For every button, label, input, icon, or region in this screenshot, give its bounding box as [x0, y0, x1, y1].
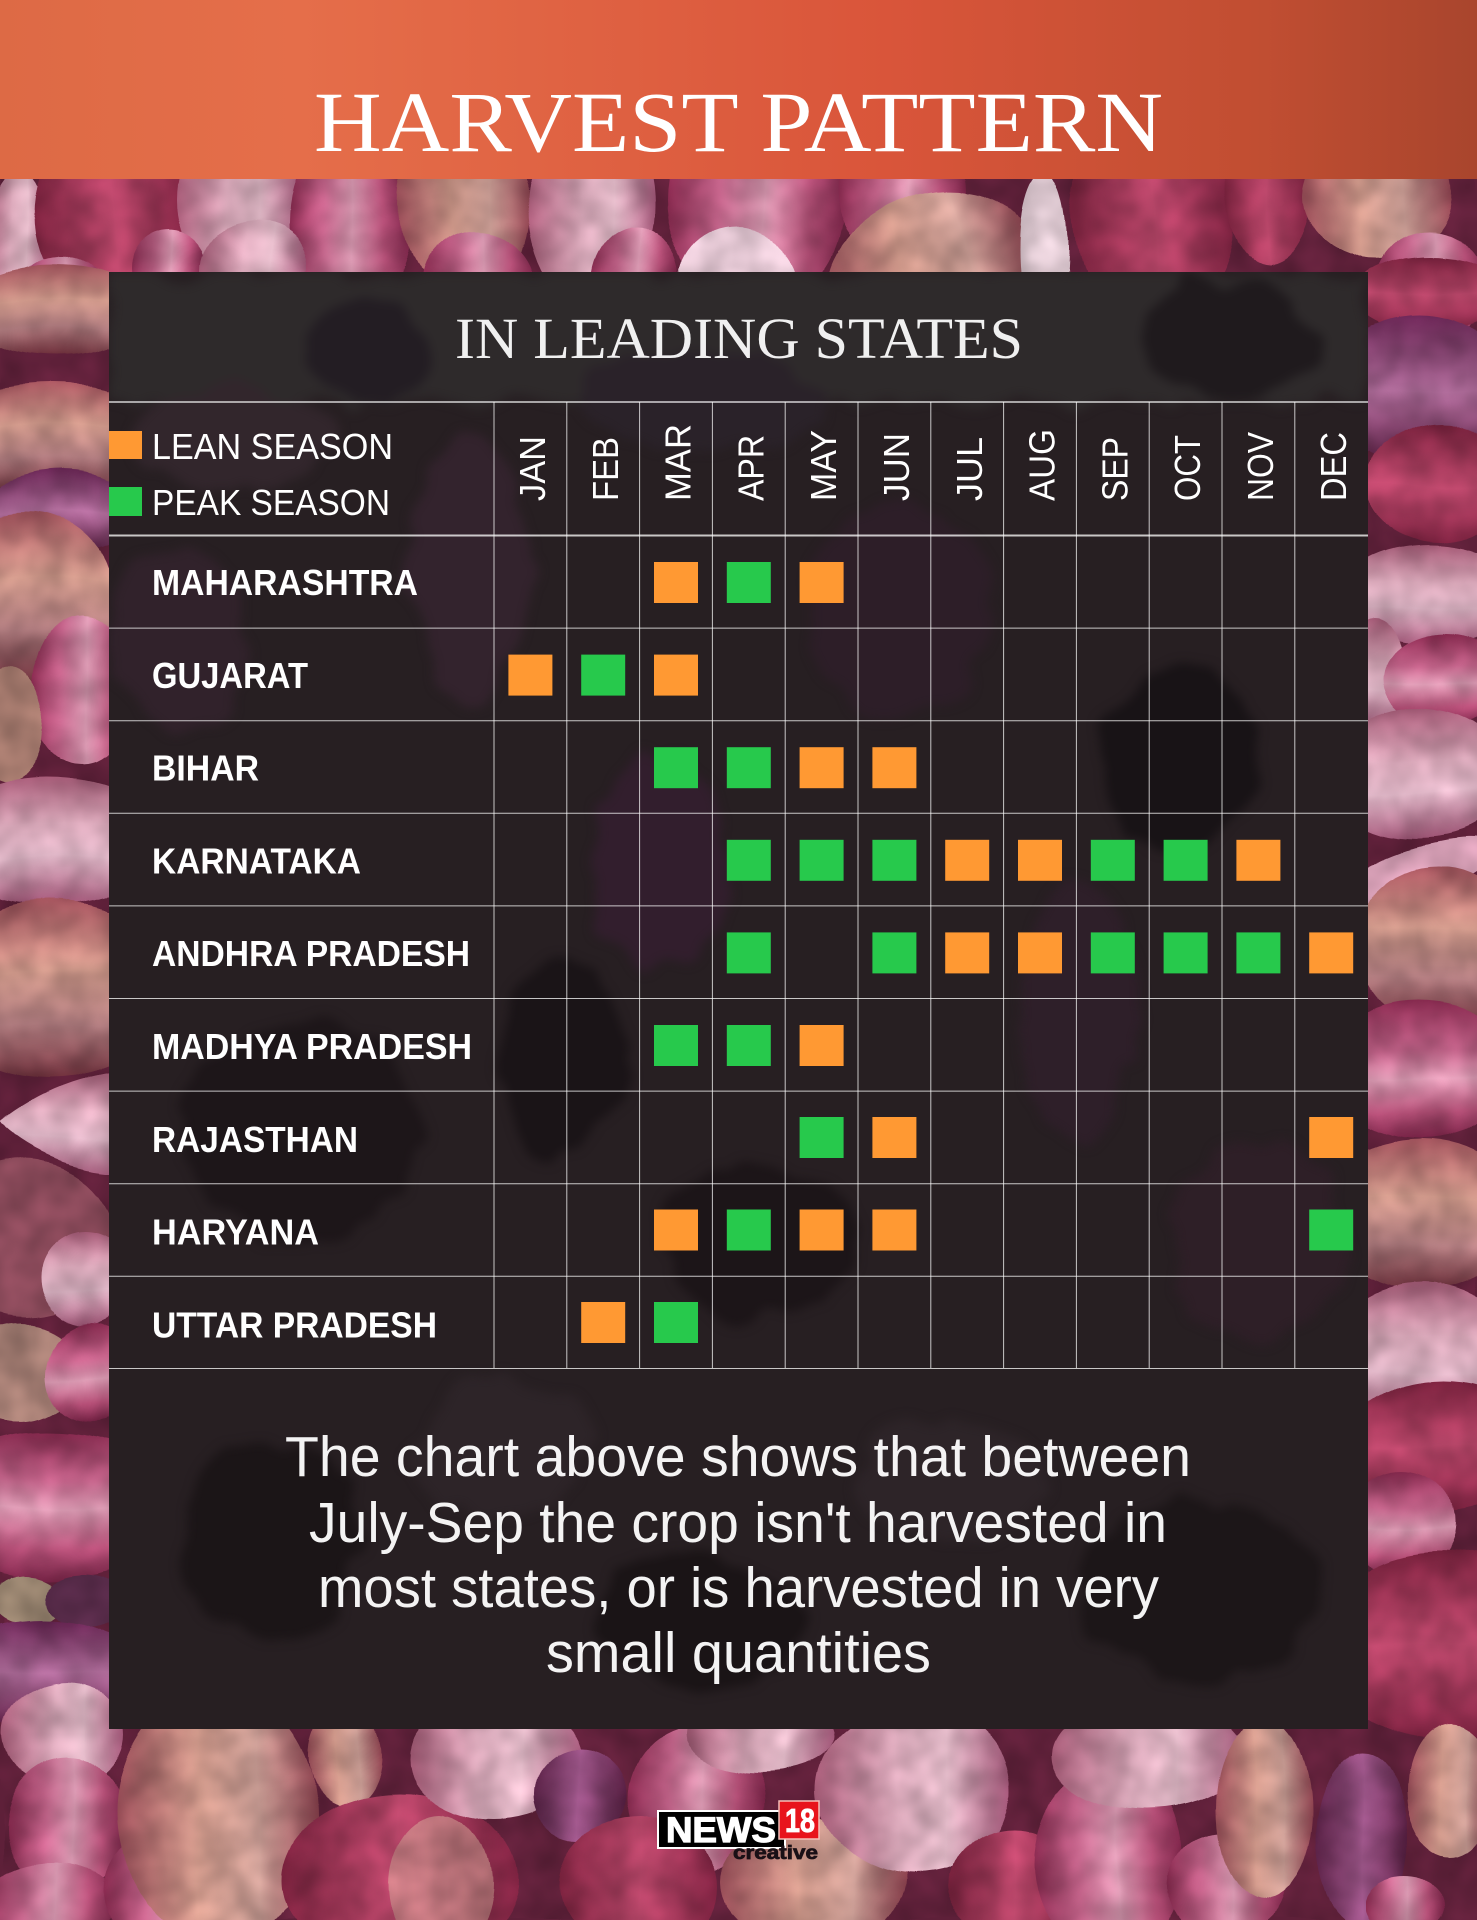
row: Maharashtra	[152, 562, 844, 603]
row: Gujarat: GUJARAT	[152, 655, 308, 696]
row: Karnataka	[152, 840, 1280, 881]
month headers: OCT	[1167, 435, 1208, 501]
month headers: JUL	[949, 437, 990, 501]
row: Bihar: BIHAR	[152, 748, 259, 789]
month headers: DEC	[1313, 432, 1354, 501]
row: Haryana	[152, 1210, 1353, 1253]
month headers: NOV	[1240, 432, 1281, 501]
legend: PEAK SEASON	[152, 482, 390, 523]
month headers: APR	[730, 435, 771, 501]
month headers: MAR	[658, 424, 699, 501]
subtitle: IN LEADING STATES	[455, 306, 1023, 371]
title banner	[0, 0, 1477, 179]
logo: News18 creative: creative	[733, 1843, 818, 1864]
right	[1355, 257, 1477, 333]
month headers: JAN	[512, 436, 553, 501]
month headers	[512, 424, 1354, 501]
caption text	[285, 1425, 1191, 1685]
row: Uttar Pradesh: UTTAR PRADESH	[152, 1304, 437, 1345]
bottom	[5, 1683, 125, 1787]
month headers: MAY	[803, 430, 844, 501]
logo: News18 creative: NEWS	[666, 1811, 776, 1850]
month headers: JUN	[876, 433, 917, 501]
logo: News18 creative: 18	[785, 1802, 815, 1839]
row: Rajasthan: RAJASTHAN	[152, 1119, 358, 1160]
legend: LEAN SEASON	[152, 426, 393, 467]
month headers: AUG	[1022, 429, 1063, 501]
legend	[109, 426, 393, 523]
logo: News18 creative	[658, 1801, 819, 1864]
row: Haryana: HARYANA	[152, 1212, 319, 1253]
row: Uttar Pradesh	[152, 1302, 698, 1345]
panel: harvest chart	[109, 272, 1368, 1729]
left	[0, 266, 145, 358]
caption text: The chart above shows that between	[285, 1425, 1191, 1489]
row: Karnataka: KARNATAKA	[152, 840, 361, 881]
row: Bihar	[152, 747, 916, 789]
title banner: HARVEST PATTERN	[314, 74, 1163, 170]
row: Madhya Pradesh	[152, 1025, 844, 1067]
row: Rajasthan	[152, 1117, 1353, 1160]
chart grid lines	[109, 402, 1368, 1368]
row: Maharashtra: MAHARASHTRA	[152, 562, 418, 603]
row: Andhra Pradesh	[152, 932, 1353, 974]
row: Madhya Pradesh: MADHYA PRADESH	[152, 1026, 472, 1067]
caption text: July-Sep the crop isn't harvested in	[309, 1491, 1167, 1555]
caption text: small quantities	[546, 1621, 931, 1685]
month headers: FEB	[585, 437, 626, 501]
month headers: SEP	[1094, 437, 1135, 501]
row: Gujarat	[152, 655, 698, 696]
caption text: most states, or is harvested in very	[318, 1556, 1159, 1620]
row: Andhra Pradesh: ANDHRA PRADESH	[152, 933, 470, 974]
